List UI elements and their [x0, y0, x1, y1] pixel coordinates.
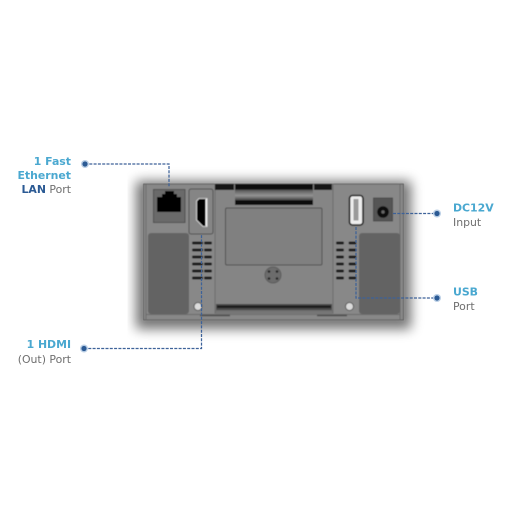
- label: hdmi port: [18, 338, 72, 366]
- grey panel: left: [148, 233, 189, 314]
- icon: dc power jack: [374, 198, 392, 221]
- marker: hdmi: [80, 344, 88, 352]
- right white button: [346, 302, 354, 310]
- label: ethernet port: [17, 155, 72, 196]
- grey panel: right: [359, 233, 400, 314]
- right vents: [336, 242, 356, 280]
- centre battery cover: [215, 184, 333, 313]
- leader line: dc input: [393, 212, 437, 214]
- label: hdmi port: (Out) Port: [18, 353, 72, 366]
- icon: ethernet port: [154, 190, 185, 222]
- label: usb port: USB: [453, 286, 478, 298]
- icon: hdmi port: [189, 189, 213, 234]
- label: dc input: Input: [453, 216, 482, 229]
- label: dc input: [453, 202, 494, 229]
- label: ethernet port: LAN Port: [21, 183, 72, 196]
- label: hdmi port: 1 HDMI: [27, 338, 71, 351]
- label: ethernet port: 1 Fast: [34, 155, 71, 168]
- label: usb port: Port: [453, 300, 475, 313]
- marker: dc input: [433, 210, 441, 218]
- label: dc input: DC12V: [453, 202, 494, 214]
- icon: usb port: [350, 196, 363, 225]
- leader line: usb: [356, 227, 437, 298]
- leader line: hdmi: [84, 235, 202, 348]
- device rear panel: [136, 181, 411, 329]
- leader line: ethernet: [85, 164, 169, 187]
- marker: ethernet: [81, 160, 89, 168]
- cover screw: [265, 267, 281, 283]
- label: ethernet port: Ethernet: [17, 169, 71, 182]
- left white button: [194, 302, 202, 310]
- left vents: [192, 242, 212, 280]
- marker: usb: [433, 294, 441, 302]
- label: usb port: [453, 286, 478, 313]
